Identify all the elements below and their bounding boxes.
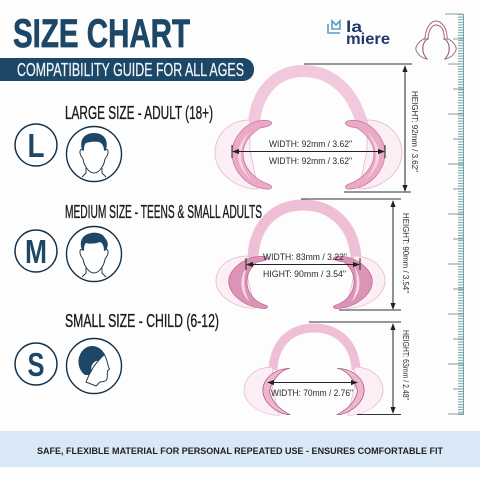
dimensions: large: WIDTH: 92mm / 3.62" bbox=[269, 139, 352, 150]
subtitle banner: COMPATIBILITY GUIDE FOR ALL AGES bbox=[17, 60, 244, 80]
badge: M: M bbox=[25, 233, 47, 270]
footer band bbox=[0, 431, 480, 467]
dimensions: small: HEIGHT: 63mm / 2.48" bbox=[401, 330, 411, 400]
title: SIZE CHART bbox=[13, 12, 190, 56]
ruler bbox=[445, 14, 464, 415]
icon: teen head bbox=[66, 226, 122, 282]
dimensions: medium bbox=[246, 199, 411, 310]
badge: L bbox=[15, 124, 57, 166]
dimensions: large: WIDTH: 92mm / 3.62" bbox=[269, 156, 352, 167]
badge: L: L bbox=[28, 127, 44, 164]
footer band: SAFE, FLEXIBLE MATERIAL FOR PERSONAL REPEATED USE - ENSURES COMFORTABLE FIT bbox=[37, 446, 443, 457]
logo: la miere bbox=[328, 19, 390, 48]
dimensions: large bbox=[232, 64, 420, 192]
subtitle banner bbox=[0, 58, 254, 81]
medium size heading: MEDIUM SIZE - TEENS & SMALL ADULTS bbox=[65, 202, 262, 222]
icon: child head bbox=[66, 338, 122, 394]
product: medium mouth prop bbox=[216, 205, 385, 309]
large size heading: LARGE SIZE - ADULT (18+) bbox=[65, 103, 213, 123]
product: small mouth prop bbox=[244, 328, 383, 415]
dimensions: medium: HEIGHT: 90mm / 3.54" bbox=[401, 213, 411, 293]
small size heading: SMALL SIZE - CHILD (6-12) bbox=[65, 311, 219, 331]
icon: small product outline bbox=[416, 21, 456, 59]
badge: M bbox=[15, 230, 57, 272]
badge: S: S bbox=[28, 346, 44, 383]
badge: S bbox=[15, 343, 57, 385]
dimensions: medium: WIDTH: 83mm / 3.22" bbox=[263, 252, 347, 263]
dimensions: large: HEIGHT: 92mm / 3.62" bbox=[410, 91, 420, 172]
logo: la miere: la bbox=[346, 19, 362, 36]
icon: adult head bbox=[66, 126, 122, 182]
logo: la miere: miere bbox=[346, 31, 390, 48]
product: large mouth prop bbox=[215, 71, 402, 189]
dimensions: medium: HIGHT: 90mm / 3.54" bbox=[263, 269, 346, 280]
dimensions: small bbox=[268, 322, 411, 414]
dimensions: small: WIDTH: 70mm / 2.76" bbox=[271, 388, 353, 399]
